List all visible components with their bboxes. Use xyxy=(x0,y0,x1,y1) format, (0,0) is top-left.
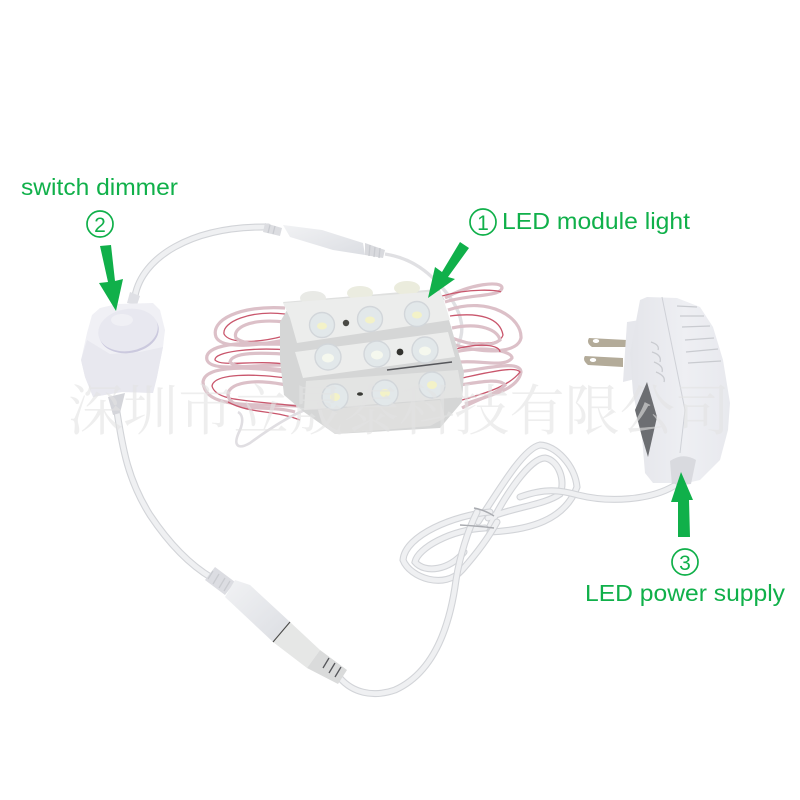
cable: dimmer to power connector xyxy=(108,393,212,578)
LED module strip 2 xyxy=(295,332,455,378)
label: LED power supply: LED power supply xyxy=(585,580,786,606)
label: switch dimmer: switch dimmer xyxy=(21,174,178,200)
number badge 1 xyxy=(470,209,496,235)
arrow: to power supply xyxy=(671,472,693,537)
power cord coil xyxy=(340,445,674,694)
number badge 3 xyxy=(672,549,698,575)
LED module strip 4 (back top) xyxy=(283,281,445,316)
lower inline connector xyxy=(205,567,347,684)
top inline connector xyxy=(263,223,385,258)
icon: dimmer switch xyxy=(81,292,165,397)
LED module strip 1 xyxy=(283,291,450,343)
label: LED module light: LED module light xyxy=(502,208,691,234)
icon: power adapter xyxy=(584,297,730,486)
arrow: to LED module xyxy=(428,242,469,298)
number badge 2: 2 xyxy=(94,214,106,237)
number badge 2 xyxy=(87,211,113,237)
watermark: 深圳市立晟泰科技有限公司 xyxy=(68,381,730,442)
cable: dimmer to module connector xyxy=(135,227,462,345)
arrow: to dimmer xyxy=(99,245,123,311)
white and red wire bundle xyxy=(203,284,521,446)
number badge 1: 1 xyxy=(477,212,489,235)
LED module stack backing xyxy=(280,290,464,434)
LED module strip 3 xyxy=(304,370,463,434)
number badge 3: 3 xyxy=(679,552,691,575)
